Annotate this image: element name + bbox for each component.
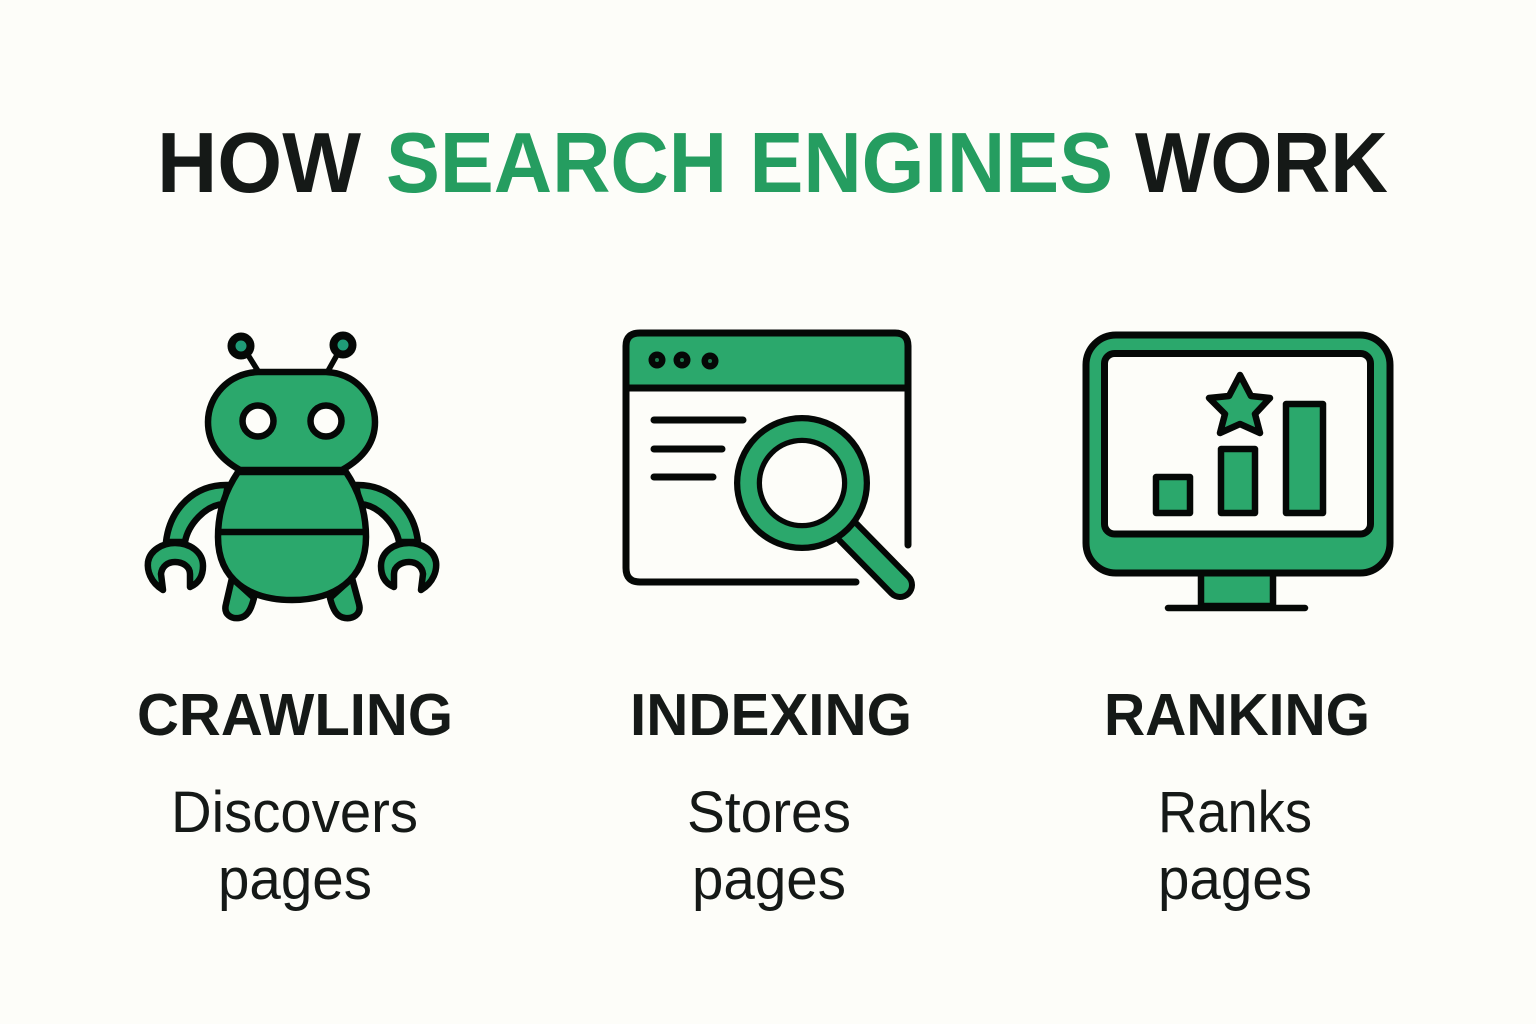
icon: browser with magnifier (626, 333, 908, 585)
description: indexing: pages (692, 847, 846, 912)
title: HOW (157, 116, 362, 211)
panel: crawling (137, 336, 453, 912)
monitor body (1086, 335, 1390, 573)
icon: robot (148, 336, 436, 618)
panel: ranking (1086, 335, 1390, 912)
heading: ranking: RANKING (1104, 682, 1370, 748)
robot head (208, 372, 375, 470)
monitor stand (1168, 570, 1305, 608)
robot arms (148, 485, 436, 590)
bar chart (1156, 404, 1323, 513)
description: indexing: Stores (687, 780, 851, 845)
description: ranking (1158, 780, 1312, 912)
description: crawling: Discovers (171, 780, 418, 845)
browser dots (648, 352, 718, 370)
description: crawling: pages (218, 847, 372, 912)
text lines (654, 420, 743, 477)
monitor screen (1104, 354, 1370, 534)
title: WORK (1135, 116, 1388, 211)
title: SEARCH ENGINES (386, 116, 1113, 211)
description: indexing (687, 780, 851, 912)
description: ranking: pages (1158, 847, 1312, 912)
description: crawling (171, 780, 418, 912)
icon: monitor with chart (1086, 335, 1390, 608)
heading: crawling: CRAWLING (137, 682, 453, 748)
heading: indexing: INDEXING (630, 682, 912, 748)
browser frame (626, 333, 908, 582)
robot antennae (232, 336, 352, 371)
robot body (218, 472, 366, 600)
title (157, 116, 1388, 211)
robot legs (225, 578, 360, 618)
magnifier (748, 429, 900, 585)
browser header (626, 333, 908, 388)
description: ranking: Ranks (1158, 780, 1312, 845)
icon: star (1209, 375, 1270, 433)
panel: indexing (626, 333, 912, 912)
